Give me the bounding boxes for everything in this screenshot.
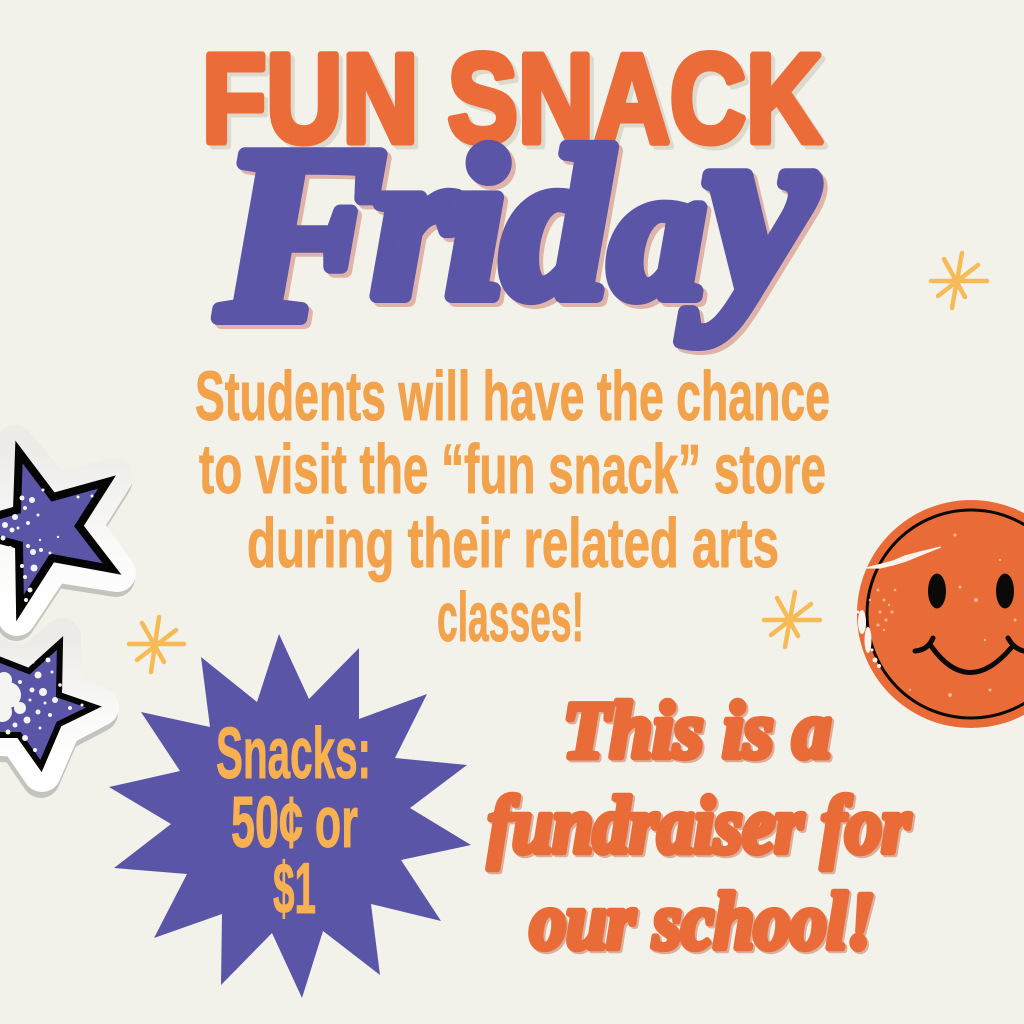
text block: fundraiser message: our school! [530,878,875,966]
text block: description: during their related arts [247,504,779,582]
text: price [216,714,371,929]
title: Friday script: F [221,100,389,377]
title: Friday script: y [683,72,821,349]
text block: fundraiser message: fundraiser for [490,784,913,872]
icon: sparkle top right [931,253,987,308]
title: Friday script: d [506,108,617,347]
text: price: Snacks: [216,714,371,794]
text: price: $1 [273,849,316,929]
icon: sparkle middle [764,592,820,647]
title: Friday script [217,68,821,377]
title: Friday script: y [679,68,817,345]
title: Friday script: i [446,104,506,343]
icon: upper star sticker [0,444,117,622]
title: FUN SNACK: FUN SNACK [202,28,822,169]
icon: lower star sticker [0,637,100,779]
title: FUN SNACK: FUN SNACK [206,32,826,173]
title: Friday script: a [614,132,709,342]
title: Friday script: i [450,108,510,347]
text block: fundraiser message: This is a [563,687,831,775]
title: Friday script: d [502,104,613,343]
text block: fundraiser message: fundraiser for [488,782,911,870]
text block: fundraiser message: our school! [532,880,877,968]
title: Friday script: F [217,96,385,373]
text block: fundraiser message [488,687,913,968]
icon: smiley face [856,500,1024,728]
text: price: 50¢ or [231,783,358,863]
title: Friday script: r [376,108,462,347]
title: Friday script: a [610,128,705,338]
badge: price starburst [109,634,471,998]
text block: description [195,357,830,656]
text block: description: classes! [437,578,584,656]
text block: fundraiser message: This is a [565,689,833,777]
icon: sparkle left [129,617,184,672]
title: Friday script: r [372,104,458,343]
